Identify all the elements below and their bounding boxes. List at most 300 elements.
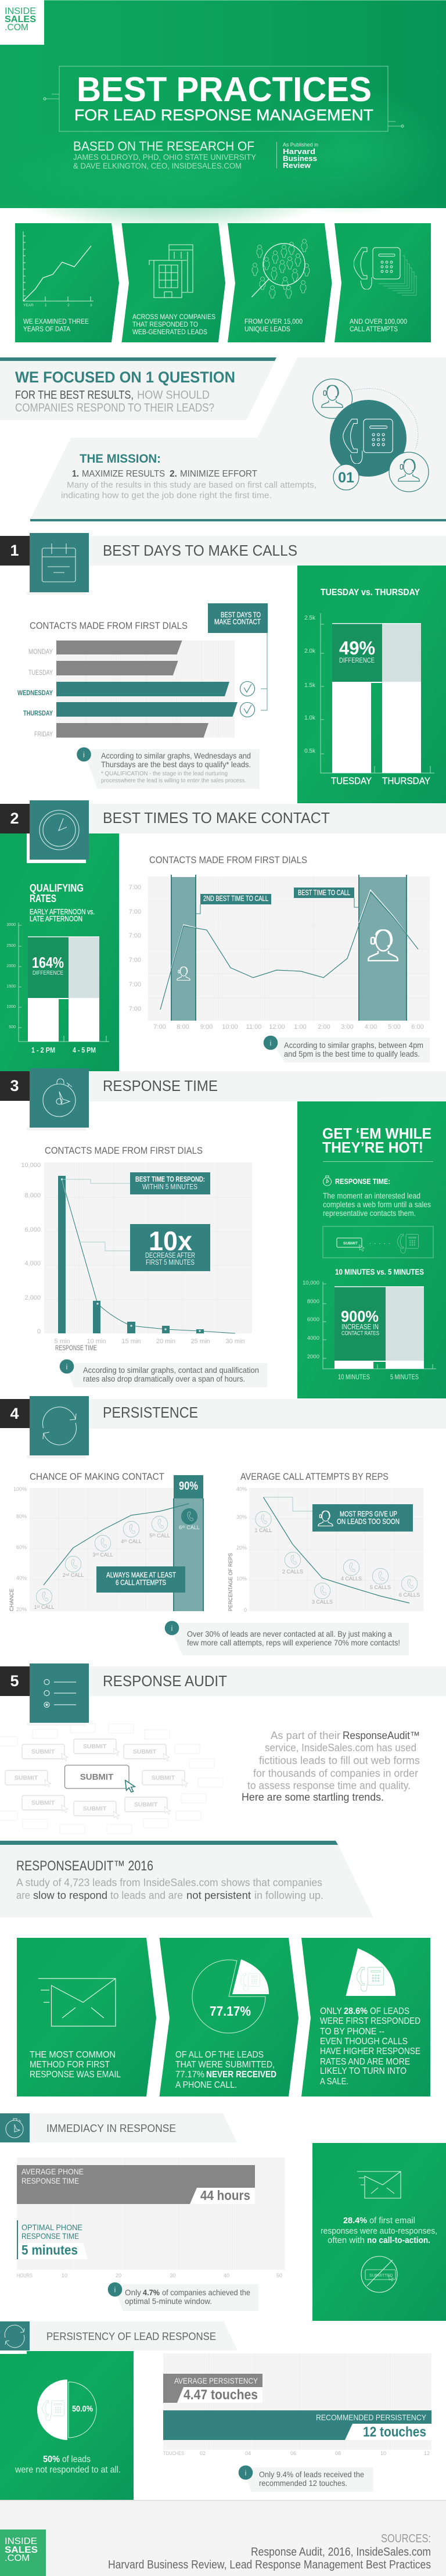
panel: tuesday vs thursday: THURSDAY [382,775,430,786]
panel: qualifying rates: 2000 [6,964,16,968]
panel: email method: RESPONSE WAS EMAIL [30,2070,121,2080]
icon: stopwatch [43,1079,75,1117]
chart: chance of making contact: 100% [13,1486,27,1492]
bar: optimal response: RESPONSE TIME [21,2231,79,2241]
callout: qualify days: i [83,750,85,759]
panel: one question: COMPANIES RESPOND TO THEIR LEADS? [15,402,214,414]
panel: responseaudit 2016: not persistent [186,1890,251,1901]
chart: contacts by response time: 4,000 [24,1260,41,1267]
bar: recommended persistency: RECOMMENDED PERSISTENCY [316,2413,427,2422]
panel: qualifying rates: 1000 [6,1005,16,1009]
panel: phone first response: WERE FIRST RESPONDED [320,2016,420,2026]
panel: never received a call: OF ALL OF THE LEADS [175,2050,264,2060]
panel: qualifying rates: DIFFERENCE [33,970,63,976]
panel: get em while they're hot: CONTACT RATES [341,1330,379,1337]
panel: get em while they're hot: INCREASE IN [341,1322,379,1331]
chart: contacts by time of day: 4:00 [365,1024,377,1031]
panel: get em while they're hot: 10 MINUTES vs. 5 MINUTES [335,1267,424,1276]
callout: six attempts: 6 CALL ATTEMPTS [116,1579,166,1587]
section header: response audit: RESPONSE AUDIT [103,1672,227,1690]
icon: desk phone [354,248,416,295]
callout: best days: BEST DAYS TO [221,611,261,619]
chart: contacts by day: TUESDAY [28,670,53,677]
chart: contacts by response time [21,1146,252,1352]
panel: auto-responses: SUBMITTED [369,2274,393,2278]
sources [108,2532,431,2571]
callout: qualify times [264,1036,430,1062]
panel: qualifying rates: 500 [9,1025,16,1029]
panel: phone first response: LIKELY TO TURN INTO [320,2066,407,2076]
icon: small rep [177,967,190,981]
chart: contacts by time of day: 9:00 [200,1024,213,1031]
chart: contacts by time of day: CONTACTS MADE FROM FIRST DIALS [149,855,307,865]
bar: recommended persistency [163,2410,431,2440]
harvard business review mark [276,142,318,170]
footer logo: .COM [5,2553,30,2563]
callout: best time to respond: WITHIN 5 MINUTES [142,1183,197,1191]
panel: qualifying rates: 1 - 2 PM [31,1046,55,1054]
chart: contacts by time of day: 6:00 [411,1024,424,1031]
callout: best time to respond [130,1172,210,1194]
main submit button [65,1765,135,1792]
panel: get em while they're hot: 2000 [307,1354,319,1360]
section header: best times [0,800,446,860]
callout: six attempts: ALWAYS MAKE AT LEAST [106,1571,176,1579]
highlight bands [171,875,407,1021]
chart: contacts by response time: 0 [37,1328,41,1335]
text: response audit intro: ResponseAudit™ [343,1730,420,1741]
panel: one question [0,357,276,420]
chart: average call attempts: PERCENTAGE OF REPS [228,1553,234,1611]
panel: email method: THE MOST COMMON [30,2050,116,2060]
panel: get em while they're hot [297,1101,446,1398]
panel: unique leads: FROM OVER 15,000 [244,319,303,325]
medium submit buttons: SUBMIT [31,1799,55,1806]
chart: contacts by time of day: 11:00 [246,1024,261,1031]
callout: optimal window: of companies achieved the [162,2288,250,2297]
panel: auto-responses: no call-to-action. [367,2235,430,2245]
chart: persistency bars: TOUCHES [163,2450,184,2456]
research credit [73,139,257,170]
panel: auto-responses: of first email [369,2216,415,2226]
panel: three years of data: 3 [90,303,92,307]
panel: tuesday vs thursday: 2.5k [304,615,316,621]
callout: never contacted: Over 30% of leads are never contacted at all. By just making a [187,1629,392,1638]
chart: average call attempts: 1 CALL [254,1527,272,1533]
highlight: 90% band [174,1475,203,1611]
difference bars [334,1286,424,1369]
chart: contacts by time of day: 7:00 [129,981,141,988]
footer logo: INSIDE [5,2536,37,2546]
logo: .COM [5,23,28,33]
panel: phone first response: A SALE. [320,2077,348,2087]
callout: optimal window: optimal 5-minute window. [125,2296,212,2306]
text: response audit intro: for thousands of companies in order [253,1768,418,1779]
medium submit buttons: SUBMIT [134,1801,158,1808]
section header: best times: BEST TIMES TO MAKE CONTACT [103,809,330,827]
panel: many companies: ACROSS MANY COMPANIES [132,314,215,321]
line series [44,1504,189,1585]
chart: average call attempts: 3 CALLS [312,1599,333,1605]
section header: best days: 1 [10,542,19,559]
chart: average call attempts: 6 CALLS [399,1592,420,1598]
chart: response time bars: 20 [116,2273,121,2278]
panel: responseaudit 2016 [0,1841,373,1917]
chart: contacts by day: THURSDAY [23,710,53,717]
section header: response audit [0,1663,446,1726]
line series [160,890,418,1010]
panel: get em while they're hot: 4000 [307,1335,319,1341]
icon: magnifier over people [252,239,310,298]
diagram: submit to phone [323,1226,433,1258]
callout: reps give up: MOST REPS GIVE UP [340,1510,397,1518]
panel: tuesday vs thursday: TUESDAY [331,775,372,786]
chart: average call attempts: 30% [236,1514,247,1520]
panel: never received a call: NEVER RECEIVED [206,2070,276,2080]
chart: contacts by time of day: 5:00 [388,1024,401,1031]
chart: contacts by time of day [129,855,430,1031]
chart: contacts by response time: CONTACTS MADE FROM FIRST DIALS [45,1146,203,1156]
callout: reps give up [312,1504,413,1532]
panel: get em while they're hot: The moment an interested lead [323,1191,420,1200]
harvard business review mark: Business [283,154,317,163]
panel: tuesday vs thursday [297,566,446,803]
panel: 50% not responded: 50% [43,2455,60,2464]
medium submit buttons: SUBMIT [15,1774,38,1781]
icon: check marks [240,681,254,717]
panel: one question: HOW SHOULD [137,389,210,402]
panel: get em while they're hot: 900% [341,1308,379,1325]
chart: persistency bars: 08 [335,2450,341,2456]
chart: average call attempts: 2 CALLS [282,1569,303,1575]
panel: responseaudit 2016: in following up. [254,1890,323,1901]
section header: response time: RESPONSE TIME [103,1077,218,1094]
chart: response time bars: 30 [170,2273,176,2278]
panel: the mission: MAXIMIZE RESULTS [82,469,165,479]
chart: average call attempts: 10% [236,1576,247,1582]
bars [58,1176,204,1333]
panel: unique leads: UNIQUE LEADS [244,326,290,333]
chart: contacts by time of day: 1:00 [294,1024,307,1031]
section header: response audit: 5 [10,1672,19,1690]
chart: contacts by response time: 25 min [190,1338,210,1345]
panel: many companies [122,223,225,342]
panel: email method [17,1938,156,2096]
chart: chance of making contact: 1ˢᵗ CALL [34,1604,55,1610]
panel: phone first response: ONLY [320,2006,342,2016]
text: response audit intro: As part of their [271,1730,340,1741]
panel: qualifying rates: 1500 [6,985,16,989]
callout: qualify times: According to similar graphs, between 4pm [284,1040,423,1050]
section header: best times: 2 [10,810,19,827]
footer logo [0,2530,46,2576]
panel: one question: WE FOCUSED ON 1 QUESTION [15,368,235,386]
chart: contacts by response time: 10 min [87,1338,106,1345]
chart: average call attempts: 4 CALLS [341,1576,362,1582]
panel: 50% not responded: of leads [62,2455,91,2464]
callout: best time [294,888,354,898]
panel: the mission: indicating how to get the job done right the first time. [61,491,272,500]
panel: qualifying rates: 164% [32,954,64,971]
chart: response time bars: 50 [276,2273,282,2278]
chart: contacts by time of day: 7:00 [129,908,141,915]
chart: contacts by time of day: 2:00 [318,1024,330,1031]
panel: qualifying rates: RATES [30,893,56,904]
bar: optimal response: 5 minutes [21,2242,78,2257]
callout: qualify days [77,747,260,789]
panel: phone first response: HAVE HIGHER RESPONSE [320,2047,420,2056]
chart: contacts by time of day: 7:00 [129,884,141,891]
callout: best days [208,603,268,633]
title frame: FOR LEAD RESPONSE MANAGEMENT [74,106,373,124]
panel: three years of data: WE EXAMINED THREE [23,319,89,325]
panel: the mission: Many of the results in this study are based on first call attempts, [67,481,316,490]
sources: SOURCES: [381,2532,431,2545]
chart: chance of making contact [9,1472,203,1612]
sub-header: immediacy in response [0,2113,237,2142]
panel: get em while they're hot: completes a web form until a sales [323,1200,431,1209]
callout: optimal window [108,2282,258,2311]
callout: 10x decrease: 10x [149,1226,192,1256]
panel: auto-responses: responses were auto-responses, [321,2226,437,2236]
callout: qualify days: Thursdays are the best days to qualify* leads. [101,760,251,769]
callout: never contacted: i [171,1624,173,1633]
panel: qualifying rates: EARLY AFTERNOON vs. [30,907,95,916]
panel: tuesday vs thursday: 0.5k [304,748,316,754]
difference bars [332,623,421,773]
panel: get em while they're hot: RESPONSE TIME: [335,1177,390,1186]
chart: average call attempts: AVERAGE CALL ATTEMPTS BY REPS [240,1472,389,1482]
chart: response time bars [17,2158,285,2278]
callout: qualify days: According to similar graphs, Wednesdays and [101,751,251,760]
callout: qualify times: and 5pm is the best time to qualify leads. [284,1049,420,1058]
bar: optimal response: OPTIMAL PHONE [21,2223,82,2232]
chart: chance of making contact: 20% [16,1607,27,1612]
harvard business review mark: Harvard [283,147,315,156]
pie slice: 28.6% [346,1948,395,1996]
callout: 10x decrease: FIRST 5 MINUTES [146,1258,195,1266]
panel: call attempts [334,223,431,342]
panel: three years of data: YEARS OF DATA [23,326,70,333]
medium submit buttons: SUBMIT [31,1748,55,1755]
panel: phone first response [301,1938,430,2096]
bar: average response: 44 hours [200,2188,250,2203]
panel: never received a call [159,1938,298,2096]
callout: drop over hours [60,1359,267,1387]
panel: phone first response: EVEN THOUGH CALLS [320,2037,408,2047]
chart: average call attempts: 0 [244,1607,247,1613]
icon: envelope [38,1978,116,2026]
icon: checklist [44,1680,76,1708]
text: response audit intro: fictitious leads to fill out web forms [259,1755,420,1766]
chart: contacts by response time: 2,000 [24,1294,41,1301]
sub-header: persistency of lead response [0,2321,238,2350]
icon: call markers [36,1508,197,1605]
chart: contacts by day: WEDNESDAY [17,690,53,697]
chart: chance of making contact: 80% [16,1514,27,1519]
section header: best days [0,533,446,595]
diagram: submit to phone: SUBMIT [343,1242,358,1246]
icon: connected callers and phone: 01 [338,470,354,486]
chart: chance of making contact: 6ᵗʰ CALL [179,1525,200,1530]
pie chart: 77.17%: 77.17% [210,2003,251,2019]
medium submit buttons: SUBMIT [83,1743,107,1750]
icon: cycle arrows [43,1407,76,1445]
section header: persistence: PERSISTENCE [103,1404,198,1421]
panel: three years of data: YEAR [23,303,34,307]
panel: get em while they're hot: representative contacts them. [323,1208,416,1218]
panel: responseaudit 2016: RESPONSEAUDIT™ 2016 [16,1858,153,1874]
harvard business review mark: Review [283,161,311,170]
chart: contacts by response time: 8,000 [24,1192,41,1199]
chart: chance of making contact: 5ᵗʰ CALL [149,1533,170,1539]
icon: stopwatch [6,2119,23,2138]
panel: the mission: MINIMIZE EFFORT [180,469,257,479]
chart: response time bars: HOURS [17,2273,33,2278]
panel: 50% not responded [0,2351,134,2500]
chart: contacts by time of day: 8:00 [177,1024,189,1031]
medium submit buttons [5,1739,188,1819]
panel: unique leads [228,223,332,342]
callout: 10x decrease [130,1224,210,1271]
callout: recommended touches: Only 9.4% of leads received the [259,2470,364,2479]
panel: tuesday vs thursday: TUESDAY vs. THURSDAY [321,588,420,598]
section header: best days: BEST DAYS TO MAKE CALLS [103,542,297,559]
highlight: 90% band: 90% [179,1480,198,1493]
icon: cycle arrows [5,2325,24,2348]
panel: the mission: 2. [170,469,177,479]
chart: persistency bars: 04 [245,2450,251,2456]
callout: best time to respond: BEST TIME TO RESPOND: [135,1175,205,1183]
pie chart: 50% [37,2380,96,2440]
chart: chance of making contact: 60% [16,1544,27,1550]
panel: call attempts: CALL ATTEMPTS [350,326,398,333]
panel: tuesday vs thursday: 1.0k [304,715,316,721]
panel: three years of data [15,223,119,342]
sub-header: persistency of lead response: PERSISTENCY OF LEAD RESPONSE [46,2331,216,2342]
panel: never received a call: 77.17% [175,2070,204,2080]
panel: the mission: THE MISSION: [80,452,161,466]
difference bars [28,936,99,1042]
logo: INSIDE [5,6,36,16]
callout: best time: BEST TIME TO CALL [298,889,350,897]
panel: qualifying rates: QUALIFYING [30,882,84,894]
panel: get em while they're hot: 6000 [307,1316,319,1323]
text: response audit intro: Here are some startling trends. [242,1791,384,1803]
panel: get em while they're hot: 8000 [307,1298,319,1305]
title frame [44,66,404,131]
callout: never contacted: few more call attempts, reps will experience 70% more contacts! [187,1638,400,1647]
pie chart: 77.17% [192,1959,269,2033]
chart: contacts by time of day: 7:00 [153,1024,166,1031]
medium submit buttons: SUBMIT [133,1748,157,1755]
panel: tuesday vs thursday: 49% [339,638,375,659]
chart: contacts by response time: 30 min [225,1338,245,1345]
panel: auto-responses: often with [328,2235,365,2245]
bar: optimal response [17,2220,88,2259]
panel: get em while they're hot: GET ‘EM WHILE [322,1125,431,1142]
panel: the mission [30,357,446,521]
icon: line chart [23,231,93,301]
panel: many companies: THAT RESPONDED TO [132,321,198,328]
logo [0,0,44,45]
panel: get em while they're hot: 10 MINUTES [338,1373,370,1381]
callout: drop over hours: rates also drop dramatically over a span of hours. [83,1374,245,1383]
callout: qualify days: * QUALIFICATION - the stage in the lead nurturing [101,770,228,777]
icon: small stopwatch [323,1176,331,1186]
bar: average persistency: 4.47 touches [184,2387,258,2403]
diagram: submit to phone: . . . . . [369,1239,390,1246]
panel: qualifying rates: LATE AFTERNOON [30,914,82,923]
panel: phone first response: RATES AND ARE MORE [320,2057,410,2067]
callout: second best time: 2ND BEST TIME TO CALL [203,895,268,903]
chart: contacts by response time: 6,000 [24,1226,41,1233]
panel: never received a call: THAT WERE SUBMITTED, [175,2060,275,2070]
chart: contacts by response time: RESPONSE TIME [55,1345,97,1352]
icon: clock [39,810,79,850]
panel: tuesday vs thursday: 1.5k [304,682,316,689]
research credit: & DAVE ELKINGTON, CEO, INSIDESALES.COM [73,161,242,170]
section header: persistence [0,1396,446,1458]
panel: responseaudit 2016: A study of 4,723 leads from InsideSales.com shows that companies [16,1877,322,1888]
icon: no call to action [361,2256,397,2292]
icon: connected callers and phone [312,379,429,492]
panel: phone first response: 28.6% [344,2006,368,2016]
callout: reps give up: ON LEADS TOO SOON [337,1518,400,1526]
panel: never received a call: A PHONE CALL. [175,2080,237,2090]
icon: large rep [368,930,398,961]
faded small buttons [0,1723,223,1834]
panel: three years of data: 2 [67,303,70,307]
main submit button: SUBMIT [80,1772,113,1782]
chart: chance of making contact: CHANCE OF MAKING CONTACT [30,1472,164,1482]
chart: average call attempts: 40% [236,1486,247,1492]
panel: email method: METHOD FOR FIRST [30,2060,110,2070]
bar: average response [17,2165,255,2204]
section header: persistence: 4 [10,1405,19,1422]
callout: best days: MAKE CONTACT [214,618,261,626]
chart: contacts by time of day: 12:00 [269,1024,285,1031]
callout: never contacted [165,1621,409,1655]
panel: get em while they're hot: 5 MINUTES [390,1373,419,1381]
section header: response time [0,1068,446,1130]
title frame: BEST PRACTICES [77,70,372,109]
chart: contacts by response time: 10,000 [21,1162,41,1169]
panel: responseaudit 2016: slow to respond [33,1890,107,1901]
panel: qualifying rates [0,833,119,1071]
panel: phone first response: OF LEADS [370,2006,409,2016]
icon: call markers [256,1511,418,1599]
chart: chance of making contact: CHANCE [9,1588,15,1611]
callout: optimal window: 4.7% [143,2288,160,2297]
callout: recommended touches [239,2466,373,2492]
callout: drop over hours: i [66,1362,68,1371]
chart: average call attempts: 5 CALLS [370,1584,391,1590]
panel: qualifying rates: 3000 [6,923,16,927]
bar: average response: RESPONSE TIME [21,2176,79,2185]
panel: tuesday vs thursday: DIFFERENCE [339,657,375,664]
chart: contacts by response time: 15 min [121,1338,141,1345]
callout: recommended touches: i [245,2468,247,2477]
chart: contacts by time of day: 3:00 [341,1024,354,1031]
chart: contacts by day [17,603,268,738]
panel: many companies: WEB-GENERATED LEADS [132,329,207,336]
callout: qualify days: processwhere the lead is willing to enter the sales process. [101,777,246,784]
callout: optimal window: Only [125,2288,141,2297]
medium submit buttons: SUBMIT [152,1774,175,1781]
callout: second best time [200,894,271,904]
text: response audit intro: to assess response time and quality. [247,1780,411,1791]
